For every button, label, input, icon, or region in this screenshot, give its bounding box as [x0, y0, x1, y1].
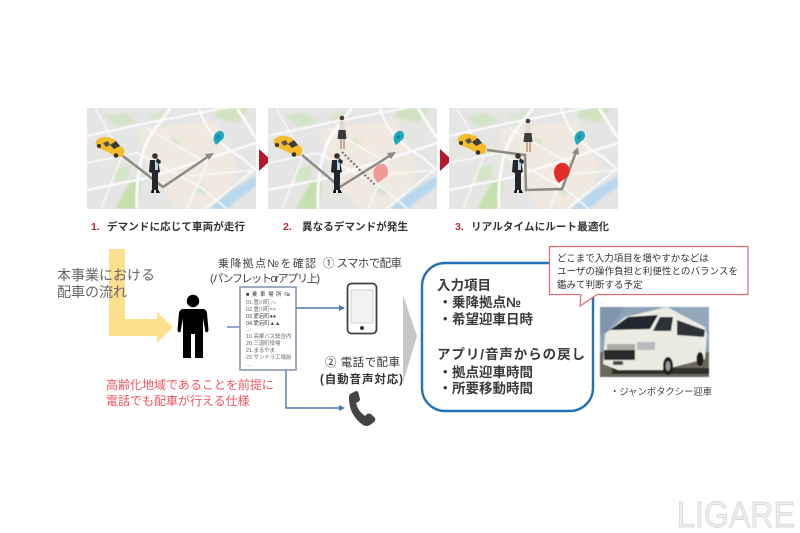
red note: 電話でも配車が行える仕様 [106, 393, 250, 408]
leaflet: 21.まるやま [246, 346, 275, 354]
taxi [274, 136, 302, 157]
smartphone label: ① スマホで配車 [323, 256, 402, 270]
confirm label [210, 256, 320, 285]
arrow: yellow L flow [109, 249, 173, 343]
red note [106, 377, 274, 408]
passenger woman [524, 119, 532, 152]
route 2 [302, 152, 396, 187]
dotted new demand [342, 152, 376, 186]
confirm label: 乗降拠点№を確認 [218, 256, 316, 270]
panel: step 1 map [87, 102, 256, 209]
arrow: step 2 to 3 [440, 149, 452, 171]
input items list: ・希望迎車日時 [438, 311, 533, 327]
infographic canvas [58, 108, 794, 528]
icon: telephone handset [349, 391, 375, 426]
leaflet [240, 287, 296, 370]
flow heading: 配車の流れ [57, 284, 127, 300]
icon: person [178, 295, 208, 358]
photo: jumbo taxi van [600, 307, 709, 377]
input items list [437, 278, 585, 396]
red pin [554, 163, 570, 183]
faded red pin [373, 164, 388, 183]
caption 1: デマンドに応じて車両が走行 [107, 220, 246, 233]
confirm label: (パンフレットorアプリ上) [210, 272, 320, 285]
flow heading: 本事業における [57, 267, 155, 283]
input items list: ・拠点迎車時間 [438, 364, 533, 380]
leaflet: … [246, 327, 251, 333]
callout: ユーザの操作負担と利便性とのバランスを [557, 266, 738, 278]
leaflet: 01.豊川町○○ [246, 298, 276, 306]
arrow: grey chevron [403, 295, 417, 382]
leaflet: ■乗車場所№ [246, 290, 290, 298]
arrow: step 1 to 2 [259, 149, 271, 171]
caption 2: 異なるデマンドが発生 [302, 220, 408, 233]
passenger man [512, 153, 524, 193]
passenger woman [338, 116, 346, 149]
red note: 高齢化地域であることを前提に [106, 377, 274, 392]
panel: step 3 map [449, 102, 618, 209]
callout: 鑑みて判断する予定 [557, 279, 643, 291]
icon: smartphone [348, 284, 376, 334]
passenger man [331, 153, 343, 193]
panel: input items [422, 263, 593, 411]
leaflet: 22.サンドラ工場前 [246, 353, 292, 361]
destination pin teal [394, 131, 404, 145]
leaflet: 04.愛宕町▲▲ [246, 319, 280, 327]
leaflet: 03.愛宕町●● [246, 312, 276, 320]
flow heading [57, 267, 155, 300]
taxi [458, 134, 486, 155]
route 1 [123, 153, 214, 187]
telephone label: (自動音声対応) [320, 372, 403, 386]
leaflet: … [246, 362, 251, 368]
callout: どこまで入力項目を増やすかなどは [557, 252, 709, 264]
panel: step 2 map [268, 102, 437, 209]
connector: person to leaflet [227, 326, 240, 328]
input items list: ・乗降拠点№ [438, 294, 521, 310]
leaflet: 20.三道町役場 [246, 339, 281, 347]
telephone label: ② 電話で配車 [325, 355, 400, 369]
taxi [96, 137, 124, 158]
input items list: 入力項目 [437, 278, 491, 293]
arrow: leaflet to telephone [286, 370, 345, 411]
leaflet: 02.豊川町×× [246, 305, 276, 313]
leaflet: 10.高柳バス総合内 [246, 332, 291, 340]
caption 1: 1. [91, 221, 100, 233]
caption 3: リアルタイムにルート最適化 [471, 220, 610, 233]
telephone label [320, 355, 403, 386]
input items list: アプリ/音声からの戻し [437, 346, 585, 362]
destination pin teal [575, 131, 585, 145]
caption 3: 3. [455, 221, 464, 233]
van caption: ・ジャンボタクシー迎車 [610, 386, 712, 398]
destination pin teal [214, 131, 224, 145]
callout [550, 246, 748, 306]
input items list: ・所要移動時間 [438, 380, 533, 396]
caption 2: 2. [283, 221, 292, 233]
passenger man [149, 153, 161, 193]
optimized route [487, 147, 579, 190]
arrow: leaflet to smartphone [296, 305, 345, 311]
